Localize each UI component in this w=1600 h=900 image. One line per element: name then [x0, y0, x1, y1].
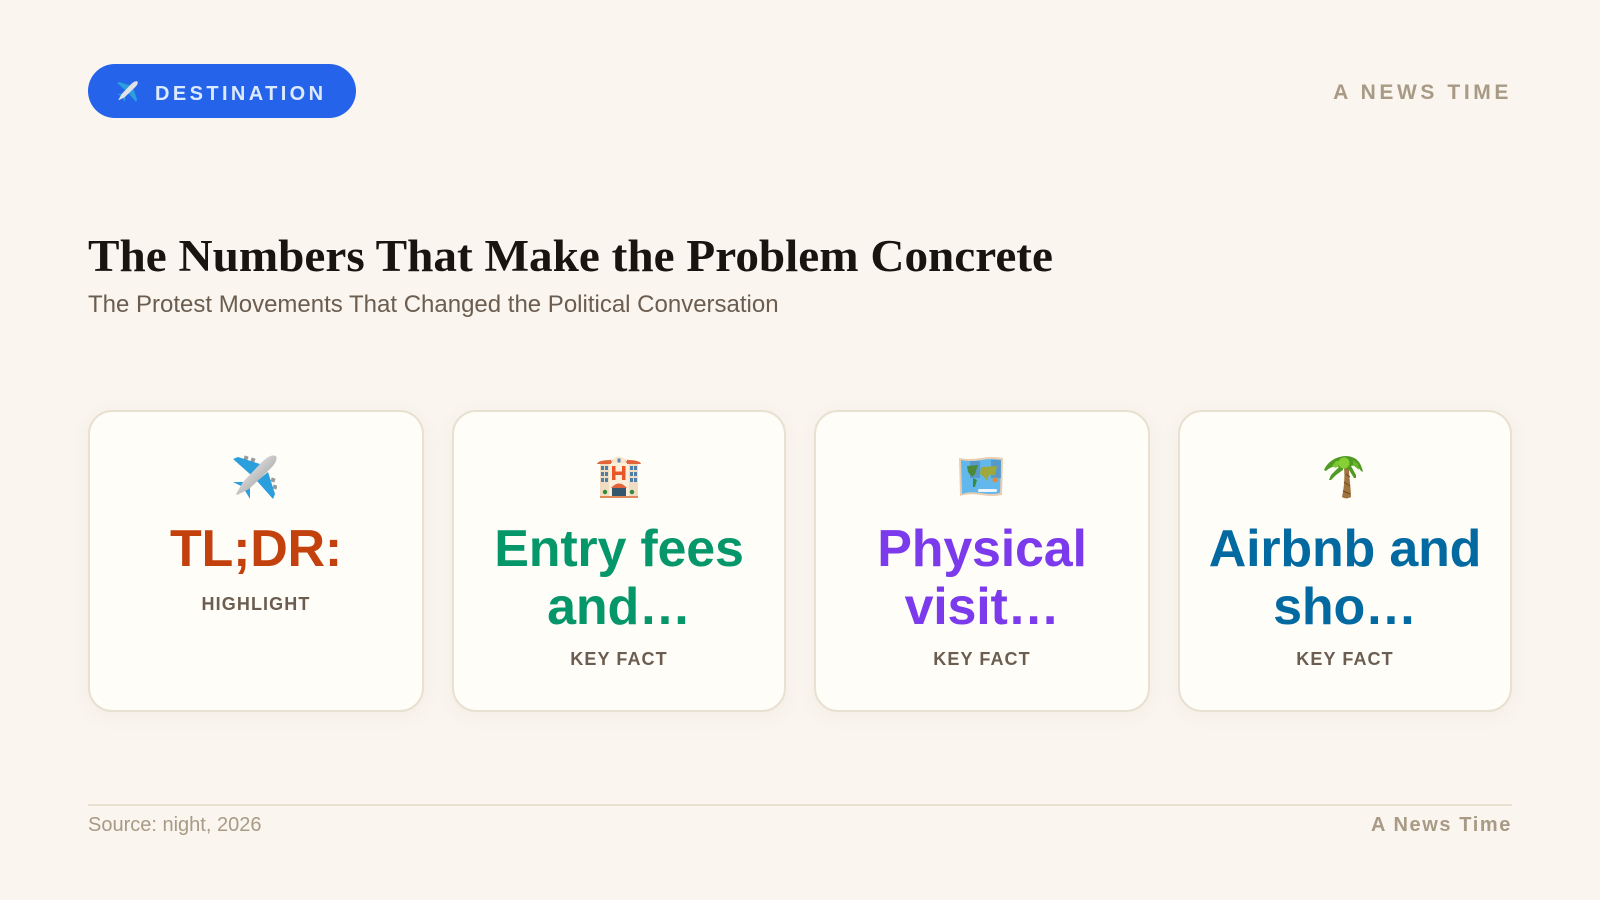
value	[1209, 520, 1481, 636]
card: TL;DR	[88, 410, 424, 712]
label: KEY FACT	[933, 649, 1031, 669]
subtitle: The Protest Movements That Changed the Political Conversation	[88, 291, 779, 318]
value: sho…	[1273, 578, 1417, 636]
card: physical visit	[814, 410, 1150, 712]
label: KEY FACT	[1296, 649, 1394, 669]
value: Entry fees	[494, 520, 744, 578]
footer brand: A News Time	[1371, 814, 1512, 836]
card: airbnb	[1178, 410, 1512, 712]
value	[877, 520, 1087, 636]
value: and…	[547, 578, 691, 636]
icon: airplane	[233, 455, 277, 499]
source note: Source: night, 2026	[88, 814, 261, 836]
value: TL;DR:	[170, 520, 342, 578]
value: visit…	[905, 578, 1059, 636]
icon: hotel	[597, 456, 641, 498]
icon: world map	[959, 457, 1003, 496]
title: The Numbers That Make the Problem Concrete	[88, 231, 1053, 281]
card: entry fees	[452, 410, 786, 712]
icon: palm tree	[1324, 456, 1363, 498]
category pill	[88, 64, 356, 118]
label: HIGHLIGHT	[202, 594, 310, 614]
brand name: A NEWS TIME	[1333, 81, 1512, 104]
value: Airbnb and	[1209, 520, 1481, 578]
footer rule	[88, 804, 1512, 806]
icon: airplane	[117, 81, 138, 102]
label: KEY FACT	[570, 649, 668, 669]
value	[494, 520, 744, 636]
pill label: DESTINATION	[155, 83, 326, 105]
value: Physical	[877, 520, 1087, 578]
